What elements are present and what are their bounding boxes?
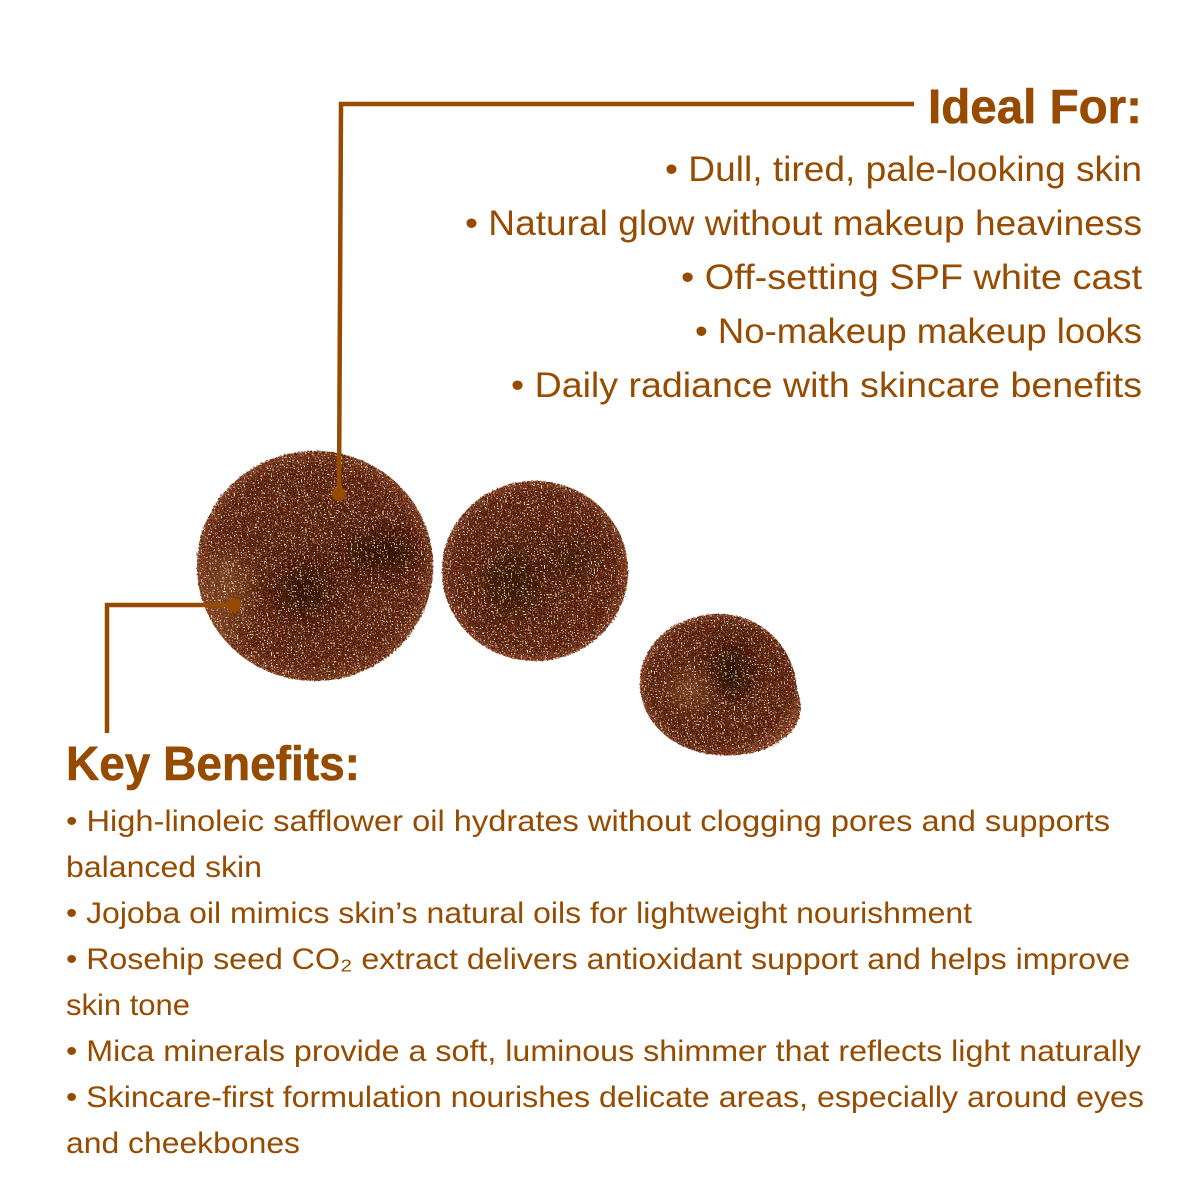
list: Key Benefits items [66,805,1144,1160]
product swatch: medium [440,480,629,662]
list: Ideal For items: • Off-setting SPF white cast [681,258,1142,297]
list: Ideal For items: • Dull, tired, pale-looking skin [665,150,1142,189]
list: Ideal For items: • Natural glow without makeup heaviness [465,204,1142,243]
heading: Key Benefits: Key Benefits: [66,738,360,791]
list: Ideal For items: • Daily radiance with skincare benefits [511,366,1142,405]
list: Key Benefits items: skin tone [66,989,190,1022]
list: Key Benefits items: balanced skin [66,851,262,884]
list: Key Benefits items: and cheekbones [66,1127,300,1160]
list: Key Benefits items: • Rosehip seed CO₂ extract delivers antioxidant support and helps improve [66,943,1130,976]
list: Key Benefits items: • Jojoba oil mimics skin’s natural oils for lightweight nourishment [66,897,973,930]
list: Ideal For items [465,150,1142,405]
list: Key Benefits items: • Mica minerals provide a soft, luminous shimmer that reflects light naturally [66,1035,1141,1068]
heading: Ideal For: Ideal For: [928,81,1142,134]
connector: Key Benefits to large swatch [107,598,241,733]
list: Key Benefits items: • Skincare-first formulation nourishes delicate areas, especially around eyes [66,1081,1144,1114]
product swatch: small [640,614,802,756]
connector: Ideal For to large swatch [332,104,914,501]
product swatch: large [190,445,440,685]
list: Ideal For items: • No-makeup makeup looks [695,312,1142,351]
list: Key Benefits items: • High-linoleic safflower oil hydrates without clogging pores and supports [66,805,1110,838]
